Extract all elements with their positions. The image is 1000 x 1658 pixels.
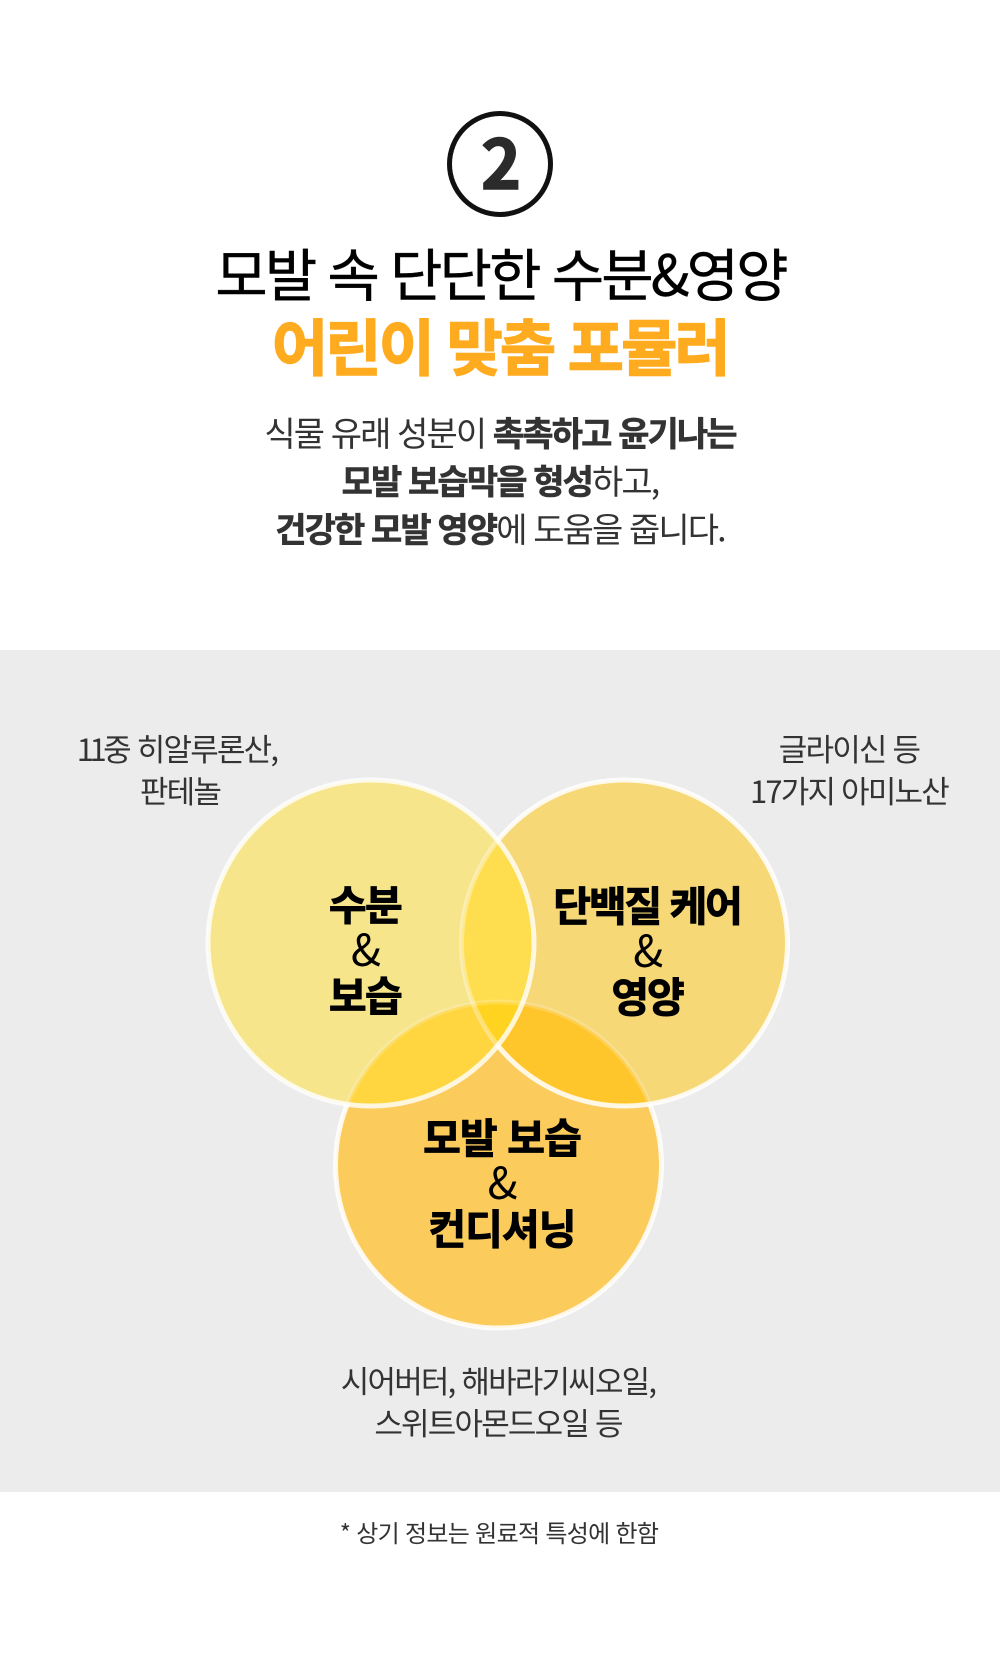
step number badge: 2: [481, 111, 521, 209]
description text: [264, 407, 736, 552]
circle text: moisture: 보습: [329, 963, 401, 1023]
panel: venn diagram background: [0, 650, 1000, 1492]
label: protein ingredients: [750, 725, 949, 812]
label: hair ingredients: 시어버터, 해바라기씨오일,: [341, 1356, 655, 1402]
circle text: protein: 영양: [611, 964, 683, 1024]
overlap: moisture and hair: [348, 1004, 496, 1104]
circle text: hair: 모발 보습: [423, 1104, 581, 1164]
footnote: * 상기 정보는 원료적 특성에 한함: [340, 1514, 658, 1549]
circle text: protein: &: [633, 916, 661, 980]
step number badge: [447, 111, 553, 217]
title line 2 highlighted: 어린이 맞춤 포뮬러: [272, 299, 728, 388]
overlap: all three: [475, 1002, 520, 1043]
circle text: protein: [553, 873, 741, 1024]
circle text: moisture: &: [351, 915, 379, 979]
label: hair ingredients: [341, 1356, 656, 1444]
label: moisture ingredients: 11중 히알루론산,: [77, 725, 277, 770]
circle text: moisture: 수분: [329, 872, 401, 932]
description text: 건강한 모발 영양에 도움을 줍니다.: [275, 503, 725, 552]
circle: protein: [462, 780, 788, 1106]
circle text: protein: 단백질 케어: [553, 873, 741, 933]
label: hair ingredients: 스위트아몬드오일 등: [374, 1398, 622, 1444]
circle text: hair: &: [487, 1148, 517, 1212]
title line 1: 모발 속 단단한 수분&영양: [215, 231, 786, 313]
overlap: protein and hair: [500, 1004, 649, 1104]
venn diagram circles: [206, 778, 790, 1330]
circle: moisture: [208, 780, 534, 1106]
circle text: moisture: [329, 872, 402, 1023]
circle: hair conditioning: [336, 1002, 662, 1328]
overlap: moisture and protein: [462, 842, 532, 1004]
description text: 모발 보습막을 형성하고,: [342, 455, 658, 504]
label: moisture ingredients: [77, 725, 278, 812]
label: protein ingredients: 글라이신 등: [779, 725, 919, 770]
label: moisture ingredients: 판테놀: [140, 767, 220, 812]
circle text: hair: 컨디셔닝: [428, 1196, 576, 1256]
circle text: hair: [423, 1104, 581, 1256]
circle outlines: [208, 780, 788, 1328]
description text: 식물 유래 성분이 촉촉하고 윤기나는: [264, 407, 736, 456]
label: protein ingredients: 17가지 아미노산: [750, 767, 948, 812]
